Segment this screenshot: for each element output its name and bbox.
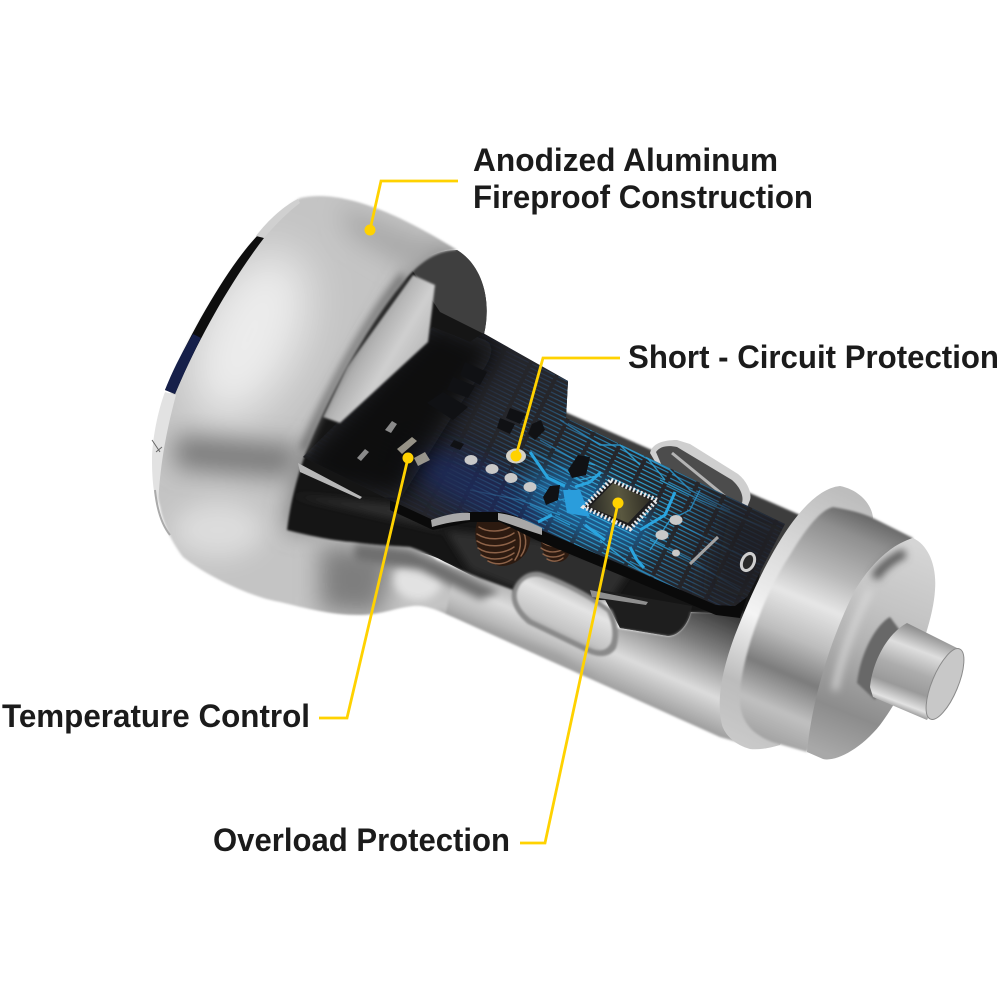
shell right shading	[285, 250, 470, 530]
cap bevel bright line	[835, 590, 870, 690]
flange and plug cap	[720, 486, 972, 759]
neck highlight	[394, 560, 442, 600]
shell top shading	[342, 208, 430, 267]
label: overload protection: Overload Protection	[213, 822, 510, 858]
label: anodized aluminum fireproof construction: Fireproof Construction	[473, 179, 813, 215]
leader: overload protection	[520, 503, 618, 843]
board thickness	[390, 500, 747, 618]
neck top dark edge	[355, 544, 500, 600]
callout dots	[364, 224, 624, 508]
blue glow lower left	[412, 442, 554, 534]
silver strip	[590, 590, 648, 605]
inner rim shading	[412, 250, 487, 334]
board edge highlights	[298, 463, 542, 535]
black plastic bracket	[600, 590, 692, 636]
center post base	[857, 617, 907, 700]
center post	[870, 623, 963, 720]
mounting hole	[739, 551, 757, 573]
leader: anodized aluminum	[370, 181, 458, 230]
neck lower	[442, 610, 567, 662]
circuit board	[298, 327, 785, 618]
label: anodized aluminum fireproof construction: Anodized Aluminum	[473, 142, 778, 178]
component: large IC	[427, 392, 468, 420]
component: transistor pair	[460, 362, 487, 385]
top USB slot	[650, 440, 750, 510]
lower plastic shading	[290, 495, 630, 600]
main chip	[584, 480, 657, 529]
silver plate inside head	[323, 275, 435, 423]
bright cyan patch near chip	[563, 490, 590, 517]
fine parallel traces	[401, 338, 785, 606]
shell lower dark band	[175, 435, 300, 478]
lens front ring	[152, 199, 300, 535]
board base	[303, 327, 785, 606]
product: cutaway car charger	[140, 180, 972, 780]
small capacitors	[357, 421, 430, 466]
upper tube behind board	[556, 408, 800, 620]
copper coils	[475, 522, 570, 566]
dark ICs and components	[427, 362, 590, 505]
routed traces	[470, 420, 770, 590]
post tip	[918, 644, 972, 724]
shell highlight	[178, 239, 324, 430]
right end fade	[700, 500, 800, 610]
callout leaders	[319, 181, 620, 843]
bright cyan traces	[530, 452, 675, 568]
leader: temperature control	[319, 458, 408, 718]
coil: large inductor	[475, 522, 530, 566]
component: small parts	[506, 408, 526, 424]
silkscreen bar	[690, 537, 718, 564]
re-cover plate edge with shell rim	[300, 272, 405, 452]
flange ring	[720, 486, 873, 749]
tube gradient	[446, 586, 745, 742]
coil: small inductor	[541, 535, 570, 562]
black interior behind circuit board	[280, 250, 770, 636]
leader: short circuit	[516, 358, 620, 456]
lower side slot	[512, 572, 618, 656]
cap end face	[807, 538, 935, 759]
label: anodized aluminum fireproof construction	[473, 142, 813, 215]
cap bevel dark patch	[875, 553, 905, 578]
aluminum shell with neck and tube	[158, 195, 744, 743]
neck mid shading	[320, 545, 395, 615]
blue glow near chip	[513, 451, 667, 569]
label: temperature control: Temperature Control	[2, 698, 310, 734]
cap cylinder	[740, 507, 913, 752]
dark corner fade	[290, 320, 500, 500]
solder pads	[464, 448, 682, 556]
shell lower light	[173, 502, 263, 558]
